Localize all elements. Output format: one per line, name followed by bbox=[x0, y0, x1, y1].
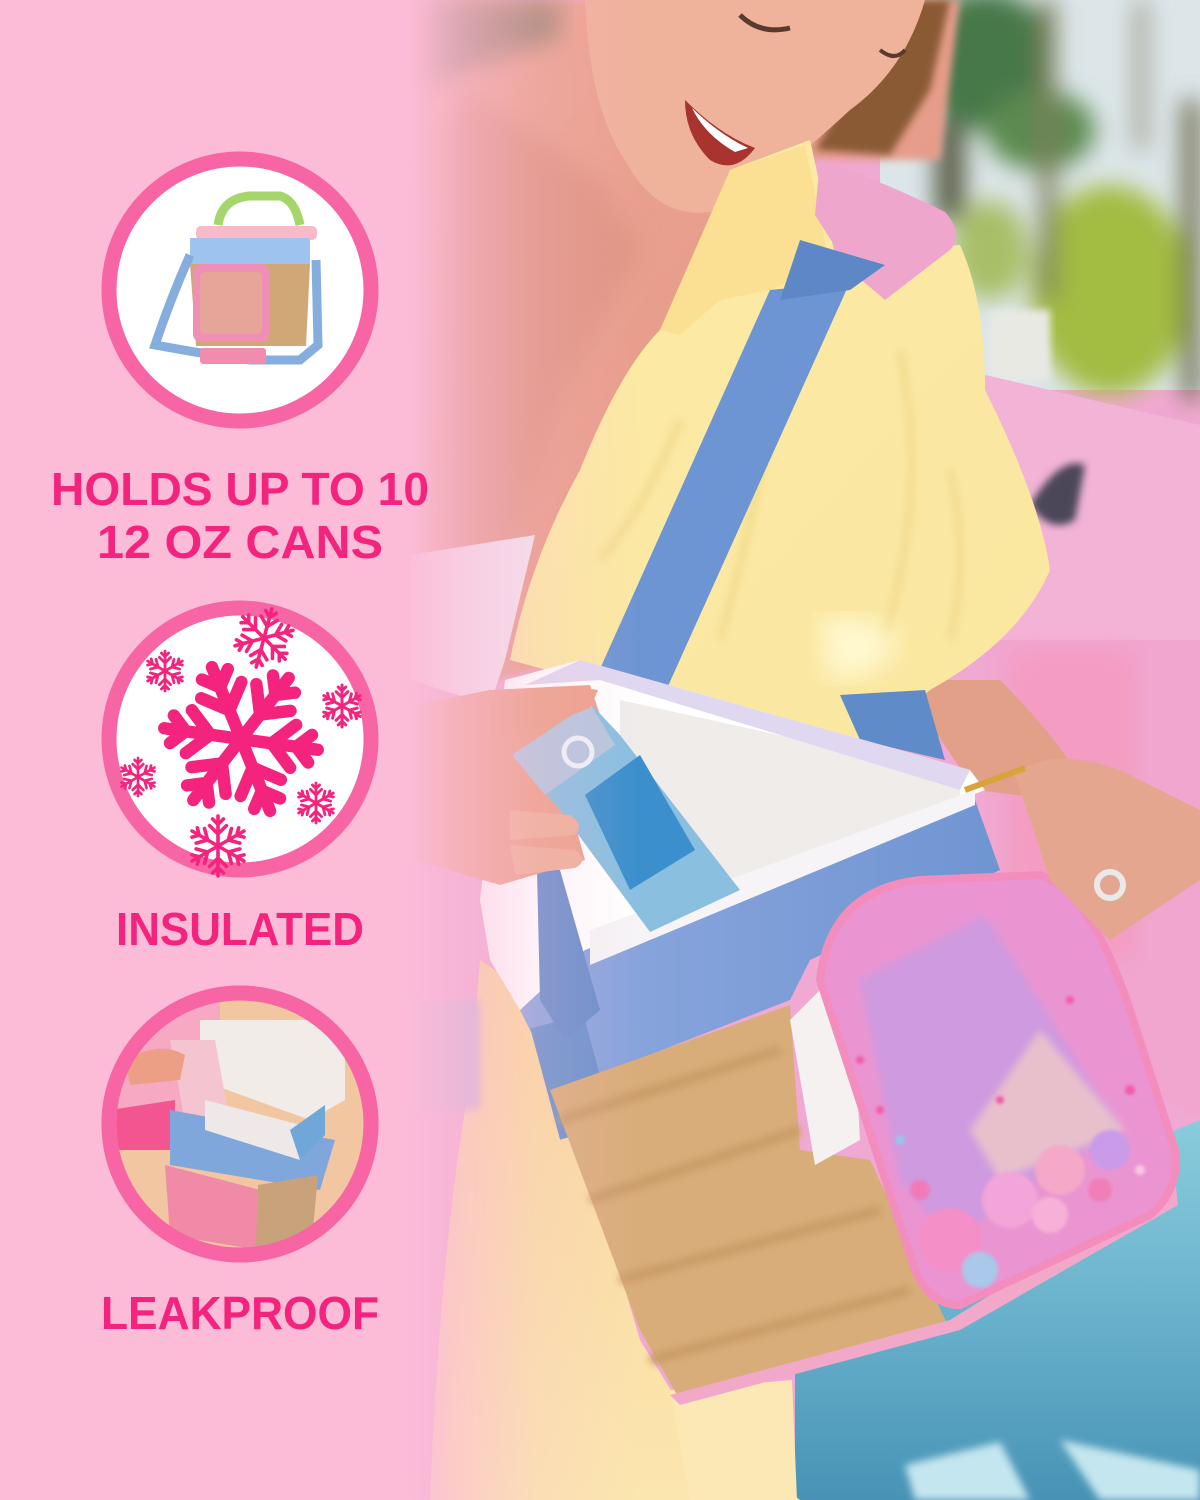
bag bottom pink trim bbox=[670, 1180, 1178, 1405]
yellow shirt bbox=[510, 140, 1050, 745]
bag: blue liner, lid and interior bbox=[480, 660, 1000, 1140]
feature 1: bag image badge bbox=[109, 159, 371, 421]
label: capacity: HOLDS UP TO 10 bbox=[51, 463, 429, 515]
hand holding can bbox=[415, 685, 600, 885]
blue shoulder strap bbox=[595, 160, 956, 715]
can bbox=[512, 703, 740, 932]
background scene: palms, wall and pool bbox=[400, 0, 1200, 1500]
hand with zipper bbox=[965, 759, 1200, 940]
icon: bag product shot bbox=[155, 196, 318, 364]
woman: skin, hair and face bbox=[400, 0, 960, 680]
label: capacity bbox=[51, 463, 429, 568]
right arm bbox=[900, 680, 1075, 800]
white zip pocket bbox=[790, 960, 860, 1165]
feature 2: snowflake badge bbox=[109, 601, 371, 876]
pants bbox=[430, 960, 800, 1500]
feature 3: leakproof photo badge bbox=[109, 990, 371, 1260]
denim shorts bbox=[405, 1000, 480, 1110]
woven straw body bbox=[550, 1005, 950, 1400]
icon: small snowflakes bbox=[119, 601, 363, 876]
floral top bbox=[410, 535, 535, 705]
clear confetti pocket bbox=[820, 875, 1176, 1305]
label: insulated: INSULATED bbox=[116, 903, 364, 955]
label: leakproof: LEAKPROOF bbox=[101, 1287, 379, 1339]
left pink fade panel bbox=[0, 0, 640, 1500]
fingers on can bbox=[490, 687, 598, 875]
icon: large snowflake bbox=[140, 638, 342, 840]
blue strap behind the bag bbox=[840, 690, 945, 760]
label: capacity: 12 OZ CANS bbox=[97, 516, 383, 568]
